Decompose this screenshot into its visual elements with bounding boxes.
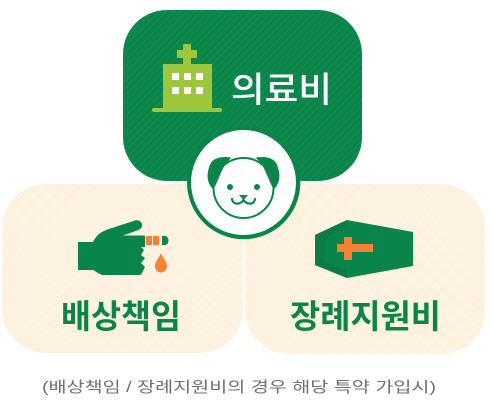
icon: hospital — [152, 44, 222, 112]
panel: funeral support — [245, 184, 485, 354]
panel: liability — [2, 184, 243, 353]
panel: medical costs — [123, 10, 362, 181]
icon: bleeding finger — [78, 220, 168, 275]
caption: (배상책임 / 장례지원비의 경우 해당 특약 가입시) — [42, 379, 436, 396]
heading: medical costs: 의료비 — [231, 71, 332, 110]
heading: liability: 배상책임 — [61, 298, 181, 335]
badge: dog — [187, 126, 300, 239]
icon: coffin — [315, 220, 413, 278]
icon: dog face — [208, 158, 279, 218]
heading: funeral support: 장례지원비 — [290, 298, 441, 335]
